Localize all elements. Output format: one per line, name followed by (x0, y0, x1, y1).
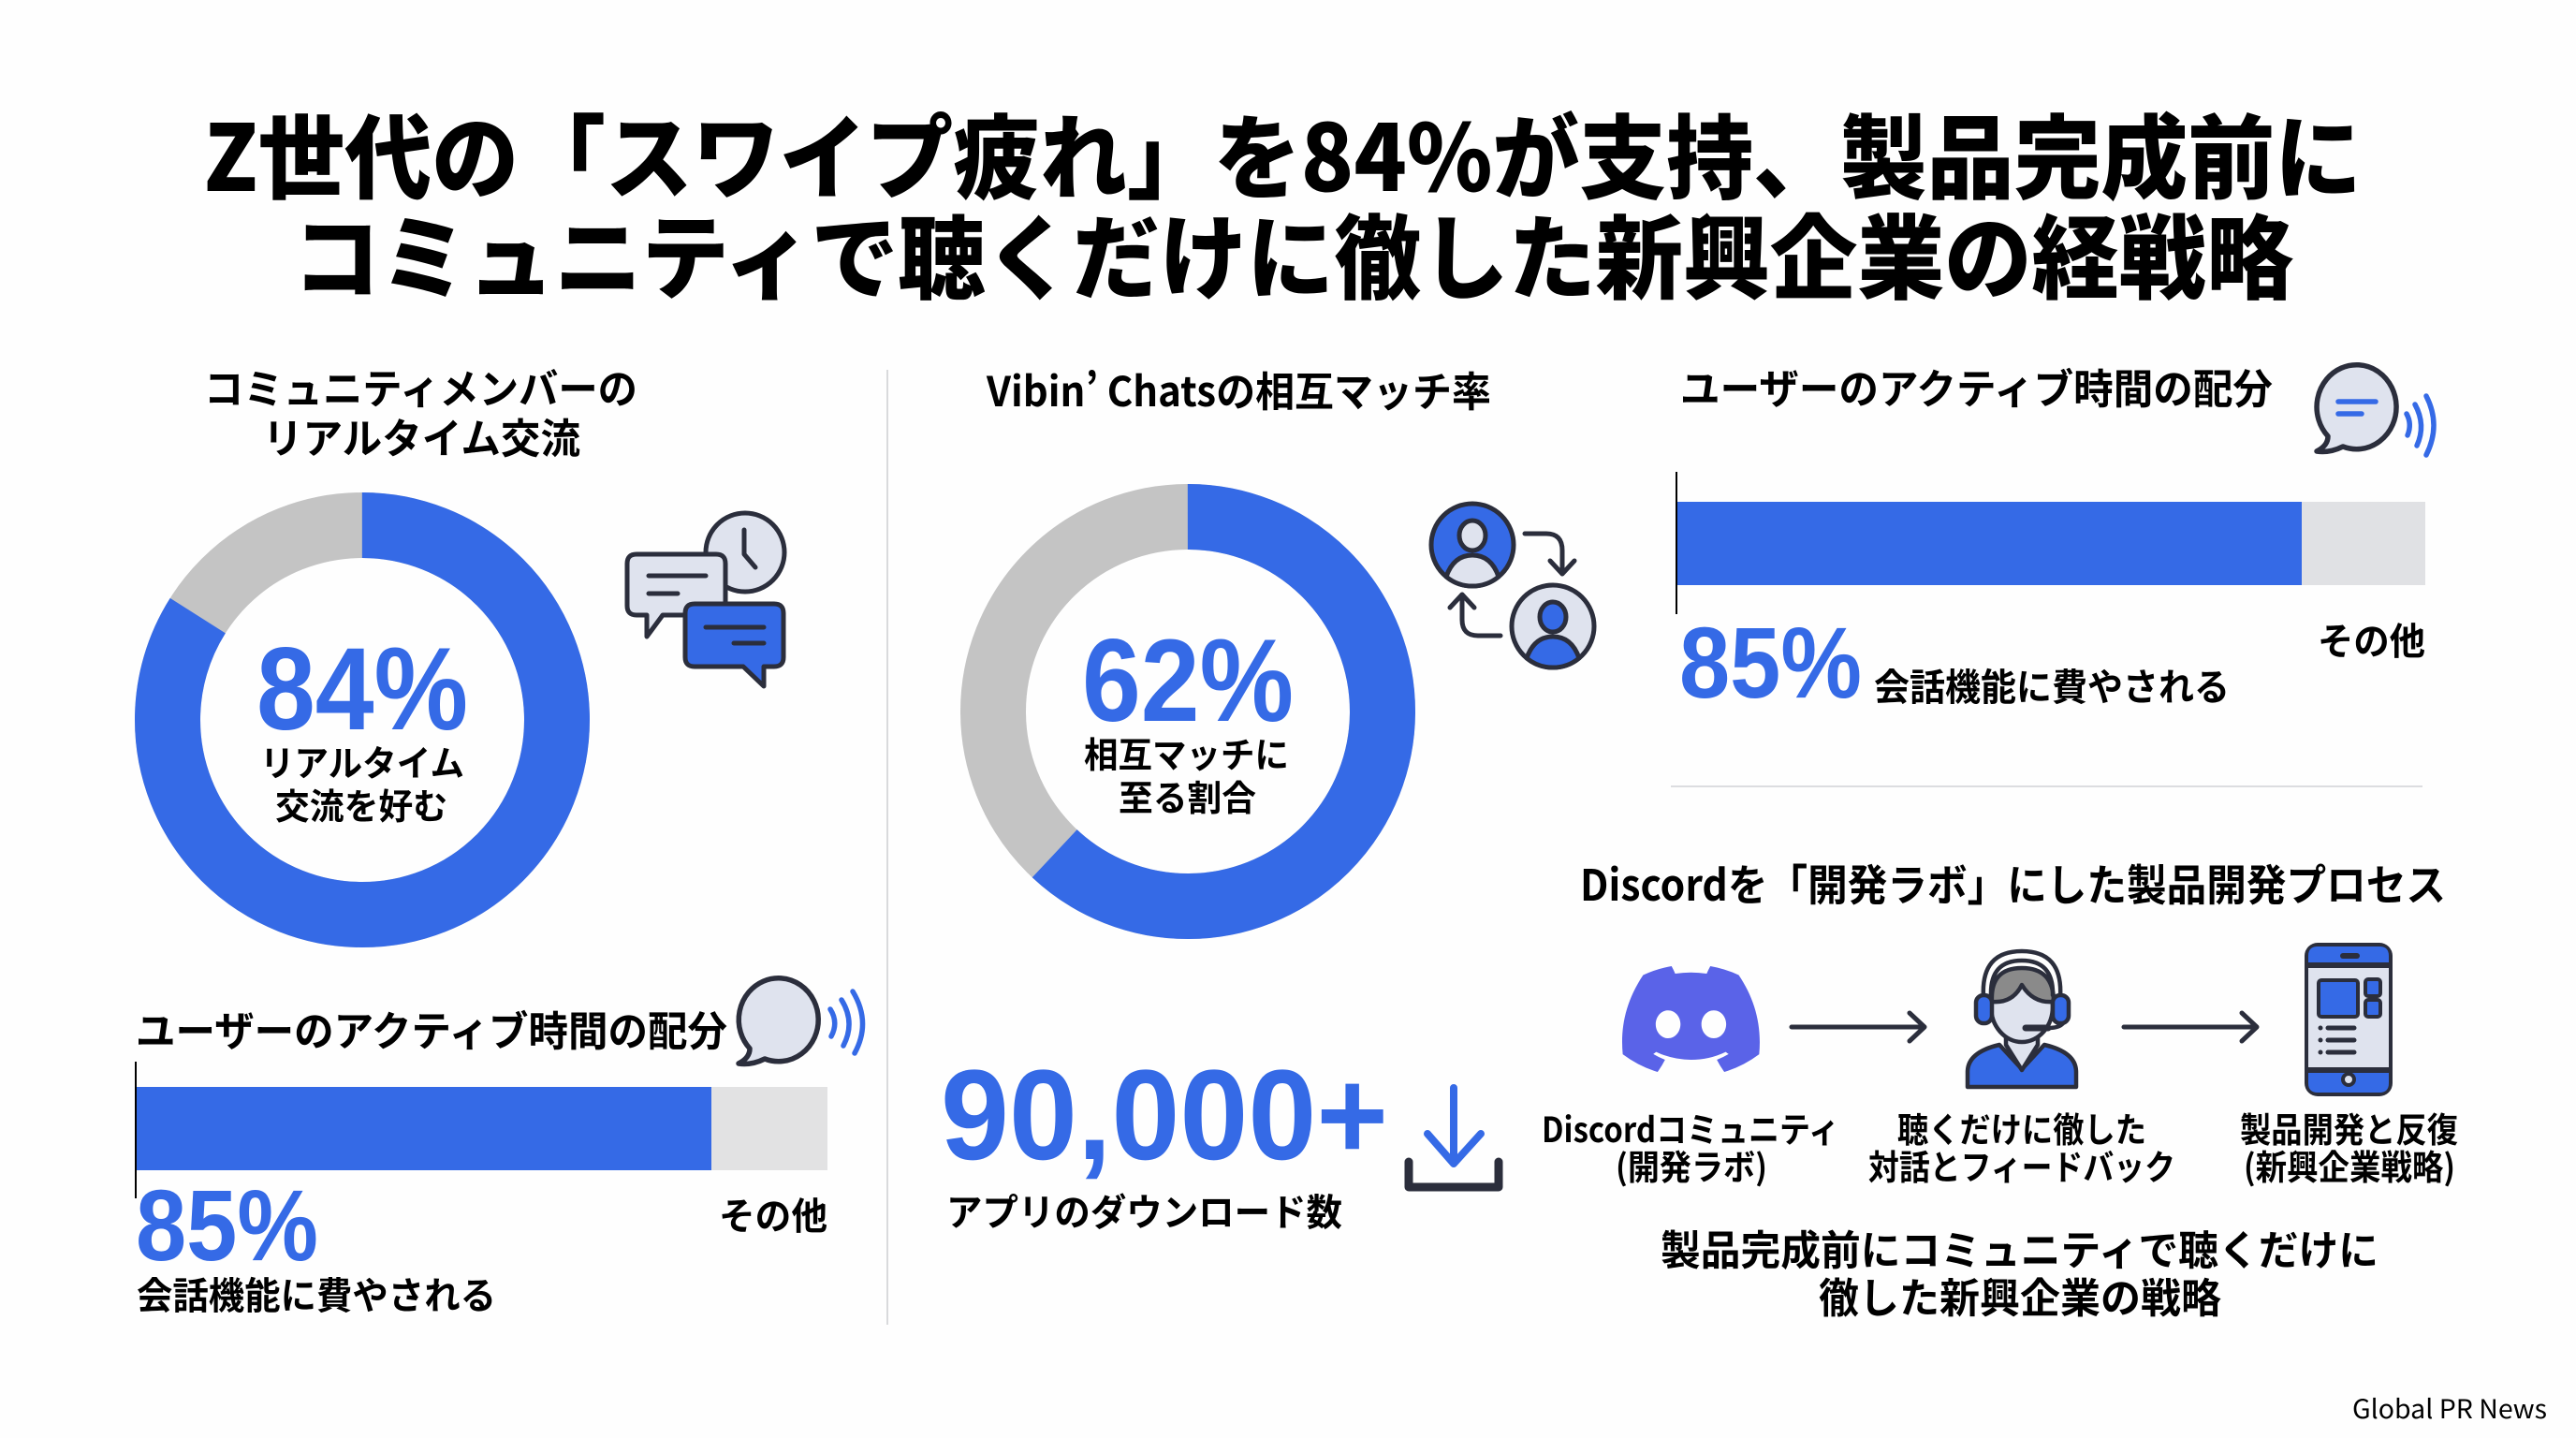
heading: community members (204, 356, 637, 465)
icon: smartphone (2305, 943, 2393, 1096)
panel: downloads (941, 1044, 1499, 1237)
bar chart: 85% (1676, 472, 2425, 614)
summary text (1661, 1217, 2378, 1325)
panel: active time bar (left) (135, 978, 863, 1320)
summary text: 製品完成前にコミュニティで聴くだけに (1661, 1217, 2378, 1277)
donut chart: 84% (168, 525, 557, 915)
panel: Discord development process (1542, 852, 2458, 1325)
donut caption: 至る割合 (1119, 770, 1256, 821)
label: conversation: 会話機能に費やされる (137, 1266, 496, 1320)
title: Z世代の「スワイプ疲れ」を84%が支持、製品完成前に (204, 85, 2362, 218)
heading: Vibin' Chats: Vibin’ Chatsの相互マッチ率 (986, 359, 1491, 418)
stat: 85%: 85% (1679, 606, 1862, 719)
title: コミュニティで聴くだけに徹した新興企業の経戦略 (293, 185, 2293, 318)
caption: Discord community (1542, 1102, 1839, 1190)
donut caption (1084, 726, 1289, 821)
caption: Discord community: Discordコミュニティ (1542, 1102, 1839, 1152)
panel: active time bar (right) (1676, 356, 2434, 719)
stat: 85%: 85% (136, 1168, 318, 1282)
donut caption: 相互マッチに (1084, 726, 1289, 778)
caption: product iteration: 製品開発と反復 (2240, 1102, 2458, 1152)
panel: mutual match donut (986, 359, 1594, 906)
bar chart: 85% (135, 1062, 827, 1198)
heading: active time: ユーザーのアクティブ時間の配分 (1680, 356, 2273, 416)
donut caption: 交流を好む (275, 778, 447, 829)
label: other: その他 (2318, 611, 2425, 666)
caption: listening dialogue: 対話とフィードバック (1868, 1139, 2175, 1190)
label: app downloads: アプリのダウンロード数 (946, 1182, 1342, 1237)
donut caption (260, 735, 464, 829)
icon: speech bubble with sound waves (739, 978, 863, 1064)
heading: active time: ユーザーのアクティブ時間の配分 (136, 998, 727, 1058)
label: other: その他 (719, 1186, 827, 1240)
heading: community members: リアルタイム交流 (263, 405, 580, 465)
title (204, 85, 2362, 318)
icon: Discord (1622, 966, 1760, 1072)
caption: product iteration: (新興企業戦略) (2244, 1139, 2455, 1190)
arrow: to listening (1792, 1013, 1925, 1041)
arrow: to product (2124, 1013, 2257, 1041)
icon: matching users (1431, 504, 1594, 668)
source credit: Global PR News (2352, 1389, 2547, 1427)
stat: 62%: 62% (1082, 616, 1294, 746)
donut caption: リアルタイム (260, 735, 464, 786)
label: conversation: 会話機能に費やされる (1874, 657, 2230, 712)
icon: listening person with headset (1968, 951, 2076, 1087)
caption: listening dialogue (1868, 1102, 2175, 1190)
icon: download (1409, 1088, 1499, 1187)
stat: 84%: 84% (256, 624, 468, 755)
panel: real-time interaction donut (168, 356, 784, 915)
donut chart: 62% (993, 517, 1383, 906)
heading: Discord lab: Discordを「開発ラボ」にした製品開発プロセス (1580, 852, 2446, 914)
icon: chat bubbles and clock (627, 513, 784, 686)
caption: Discord community: (開発ラボ) (1616, 1139, 1767, 1190)
heading: community members: コミュニティメンバーの (204, 356, 637, 416)
caption: product iteration (2240, 1102, 2458, 1190)
icon: speech bubble with sound waves (2317, 365, 2434, 455)
caption: listening dialogue: 聴くだけに徹した (1897, 1102, 2146, 1152)
summary text: 徹した新興企業の戦略 (1819, 1265, 2221, 1325)
stat: 90,000+: 90,000+ (941, 1044, 1388, 1187)
